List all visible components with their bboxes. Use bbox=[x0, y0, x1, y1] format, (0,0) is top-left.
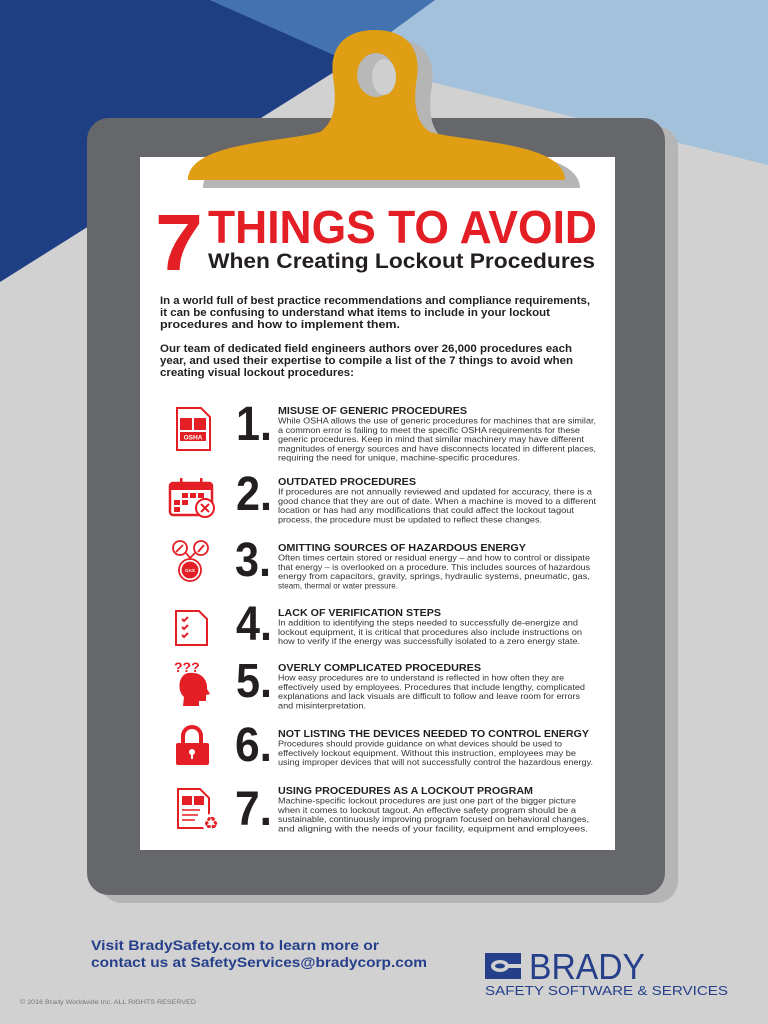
item 7: when it comes to lockout tagout. An effective safety program should be a bbox=[277, 805, 576, 815]
item 2: 2. bbox=[236, 468, 272, 521]
item 2: process, the procedure must be updated to reflect these changes. bbox=[278, 514, 542, 524]
icon: padlock bbox=[176, 727, 209, 765]
item 4: lockout equipment, it is critical that procedures also include instructions on bbox=[278, 627, 582, 637]
item 1: a common error is failing to meet the specific OSHA requirements for these bbox=[278, 425, 580, 435]
item 7 bbox=[178, 783, 589, 836]
paper bbox=[140, 157, 615, 850]
item 6: effectively lockout equipment. Without this instruction, employees may be bbox=[278, 748, 576, 758]
item 1: requiring the need for unique, machine-specific procedures. bbox=[278, 453, 520, 463]
intro text bbox=[160, 295, 590, 379]
footer contact text bbox=[91, 938, 427, 970]
item 5: explanations and lack visuals are difficult to follow and leave room for errors bbox=[278, 691, 580, 701]
title: THINGS TO AVOID bbox=[208, 201, 597, 253]
item 6: NOT LISTING THE DEVICES NEEDED TO CONTROL ENERGY bbox=[278, 729, 589, 740]
icon: OSHA document bbox=[177, 408, 210, 450]
item 7: sustainable, continuously improving program focused on behavioral changes, bbox=[278, 814, 589, 824]
item 3: steam, thermal or water pressure. bbox=[278, 580, 398, 590]
item 1: magnitudes of energy sources and have disconnects located in different places, bbox=[278, 443, 596, 453]
item 2: location or has had any modifications that could affect the lockout tagout bbox=[278, 505, 575, 515]
item 7: Machine-specific lockout procedures are just one part of the bigger picture bbox=[278, 796, 576, 806]
icon: checklist bbox=[176, 611, 207, 645]
Brady logo: SAFETY SOFTWARE & SERVICES bbox=[485, 983, 728, 998]
icon: head with question marks: ??? bbox=[174, 659, 200, 675]
title bbox=[155, 198, 597, 287]
intro text: In a world full of best practice recommendations and compliance requirements, bbox=[160, 295, 590, 307]
item 2 bbox=[170, 468, 597, 524]
Brady logo bbox=[485, 946, 728, 998]
item 4: LACK OF VERIFICATION STEPS bbox=[278, 608, 441, 619]
item 3: OMITTING SOURCES OF HAZARDOUS ENERGY bbox=[278, 543, 526, 554]
item 7: 7. bbox=[235, 783, 272, 836]
item 2: If procedures are not annually reviewed and updated for accuracy, there is a bbox=[278, 486, 592, 496]
item 5 bbox=[174, 655, 585, 710]
intro text: it can be confusing to understand what items to include in your lockout bbox=[160, 307, 551, 319]
item 3 bbox=[173, 534, 590, 590]
item 3: Often times certain stored or residual energy – and how to control or dissipate bbox=[278, 552, 590, 562]
item 6: Procedures should provide guidance on what devices should be used to bbox=[278, 738, 562, 748]
clipboard board bbox=[87, 118, 678, 903]
clip bbox=[188, 30, 580, 188]
item 3: 3. bbox=[235, 534, 271, 587]
item 5: How easy procedures are to understand is reflected in how often they are bbox=[278, 672, 564, 682]
intro text: year, and used their expertise to compile a list of the 7 things to avoid when bbox=[160, 355, 573, 367]
icon: head with question marks bbox=[174, 659, 210, 706]
title: When Creating Lockout Procedures bbox=[208, 250, 595, 273]
item 1: While OSHA allows the use of generic procedures for machines that are similar, bbox=[278, 416, 596, 426]
item 7: USING PROCEDURES AS A LOCKOUT PROGRAM bbox=[278, 786, 533, 797]
footer contact text: contact us at SafetyServices@bradycorp.com bbox=[91, 955, 427, 970]
item 4: 4. bbox=[236, 598, 272, 651]
icon: OSHA document: OSHA bbox=[184, 434, 203, 442]
copyright: © 2016 Brady Worldwide Inc. ALL RIGHTS RESERVED bbox=[20, 998, 196, 1006]
title: 7 bbox=[155, 198, 203, 287]
intro text: Our team of dedicated field engineers authors over 26,000 procedures each bbox=[160, 343, 572, 355]
item 7: and aligning with the needs of your facility, equipment and employees. bbox=[278, 823, 588, 833]
item 6: 6. bbox=[235, 719, 272, 772]
item 5: OVERLY COMPLICATED PROCEDURES bbox=[278, 663, 481, 674]
item 1: 1. bbox=[236, 398, 272, 451]
item 5: 5. bbox=[236, 655, 272, 708]
item 2: good chance that they are out of date. When a machine is moved to a different bbox=[278, 496, 597, 506]
intro text: creating visual lockout procedures: bbox=[160, 367, 354, 379]
item 3: energy from capacitors, gravity, springs, hydraulic systems, pneumatic, gas, bbox=[278, 571, 590, 581]
icon: gas gauges bbox=[173, 541, 208, 581]
icon: calendar bbox=[170, 478, 214, 517]
item 4: how to verify if the energy was successfully isolated to a zero energy state. bbox=[278, 636, 580, 646]
item 5: and misinterpretation. bbox=[278, 700, 366, 710]
item 6: using improper devices that will not successfully control the hazardous energy. bbox=[278, 757, 593, 767]
item 4 bbox=[176, 598, 582, 651]
footer contact text: Visit BradySafety.com to learn more or bbox=[91, 938, 380, 953]
item 1: MISUSE OF GENERIC PROCEDURES bbox=[278, 406, 467, 417]
item 6 bbox=[176, 719, 593, 772]
Brady logo: BRADY bbox=[529, 946, 645, 987]
icon: gas gauges: GAS bbox=[185, 568, 195, 573]
icon: document with recycle: ♻ bbox=[203, 814, 219, 833]
icon: document with recycle bbox=[178, 789, 220, 833]
item 5: effectively used by employees. Procedures that include lengthy, complicated bbox=[278, 682, 585, 692]
intro text: procedures and how to implement them. bbox=[160, 319, 400, 331]
item 1: generic procedures. Keep in mind that similar machinery may have different bbox=[278, 434, 585, 444]
item 4: In addition to identifying the steps needed to successfully de-energize and bbox=[278, 618, 578, 628]
item 1 bbox=[177, 398, 596, 463]
item 2: OUTDATED PROCEDURES bbox=[278, 477, 416, 488]
item 3: that energy – is overlooked on a procedure. This includes sources of hazardous bbox=[278, 562, 590, 572]
